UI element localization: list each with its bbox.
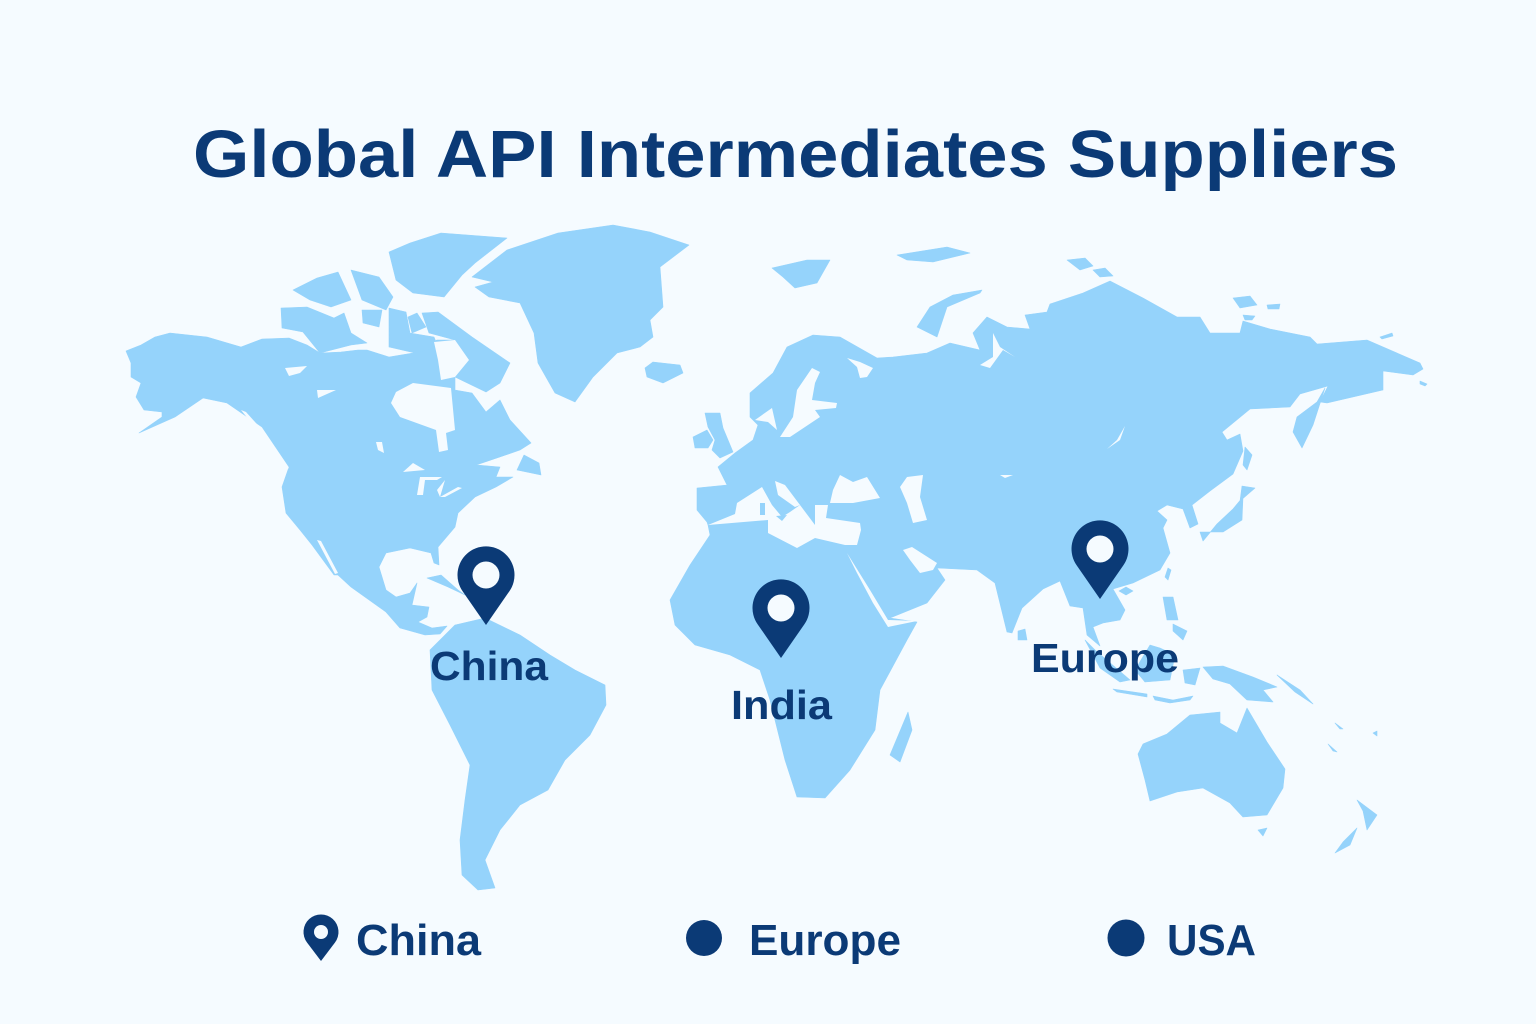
landmass: Taiwan and Hainan — [1119, 568, 1171, 595]
map pin: China label: China — [430, 643, 549, 689]
landmass: Cuba — [427, 575, 465, 595]
landmass: Australia — [1138, 708, 1285, 817]
water: Red Sea and Gulf of Aden — [847, 553, 917, 627]
landmass: Baffin Island — [422, 312, 510, 392]
water: Adriatic Sea — [775, 481, 800, 507]
landmass: Eurasia and Africa — [670, 281, 1423, 798]
landmass: Greenland — [472, 225, 689, 402]
map pin: China label — [430, 546, 549, 689]
landmass: Newfoundland — [517, 455, 541, 475]
landmass: Ellesmere Island — [389, 233, 507, 297]
water: Pacific coast inlets — [241, 410, 338, 574]
map pin: Europe label: Europe — [1031, 635, 1179, 681]
water: Foxe Basin — [434, 340, 469, 380]
water: Baltic Sea — [780, 368, 837, 437]
landmass: Victoria and Banks Islands — [281, 307, 367, 353]
landmass: New Guinea — [1203, 666, 1277, 702]
landmass: Japan — [1200, 447, 1255, 541]
water: Gulf of Ob — [980, 333, 1015, 368]
world map — [126, 225, 1427, 890]
landmass: British Isles — [693, 413, 733, 458]
landmass: New Zealand — [1335, 800, 1377, 853]
seas and lakes — [241, 333, 1125, 627]
legend item: China: China — [356, 916, 482, 965]
legend item: USA — [1108, 916, 1256, 965]
landmass: Sri Lanka — [1018, 629, 1027, 640]
landmass: Sakhalin — [1293, 388, 1325, 448]
landmass: Siberian Arctic islands — [1067, 258, 1427, 386]
title: Global API Intermediates Suppliers — [193, 117, 1398, 192]
islands in the Mediterranean — [760, 503, 787, 521]
water: Mediterranean Sea — [708, 487, 861, 548]
land masses — [126, 225, 1427, 890]
water: Black Sea — [830, 475, 880, 503]
landmass: North and Central America — [126, 333, 531, 635]
map pin: India label: India — [731, 682, 833, 728]
landmass: Pacific islands — [1277, 675, 1377, 752]
water: Hudson Bay — [391, 383, 455, 452]
water: Persian Gulf — [903, 547, 937, 573]
legend item: China — [304, 914, 482, 965]
landmass: Iceland — [645, 362, 683, 383]
legend — [304, 914, 1256, 965]
map pin: Europe label — [1031, 520, 1179, 681]
legend item: Europe: Europe — [749, 916, 901, 965]
water: White Sea — [847, 358, 873, 378]
landmass: South America — [430, 618, 606, 890]
landmass: Philippines — [1163, 597, 1187, 640]
landmass: Svalbard, Franz Josef and Novaya Zemlya — [772, 247, 982, 337]
water: Canadian lakes and Great Lakes — [285, 366, 507, 497]
landmass: Madagascar — [890, 712, 912, 762]
water: Lake Baikal and Balkhash — [1000, 426, 1125, 478]
water: Skagerrak — [755, 408, 777, 430]
landmass: Arctic archipelago — [293, 270, 438, 353]
landmass: Tasmania — [1258, 828, 1267, 836]
legend item: USA: USA — [1167, 916, 1256, 965]
water: Caspian Sea — [900, 475, 927, 523]
landmass: Indonesia — [1085, 640, 1200, 703]
map pin: India label — [731, 579, 833, 728]
